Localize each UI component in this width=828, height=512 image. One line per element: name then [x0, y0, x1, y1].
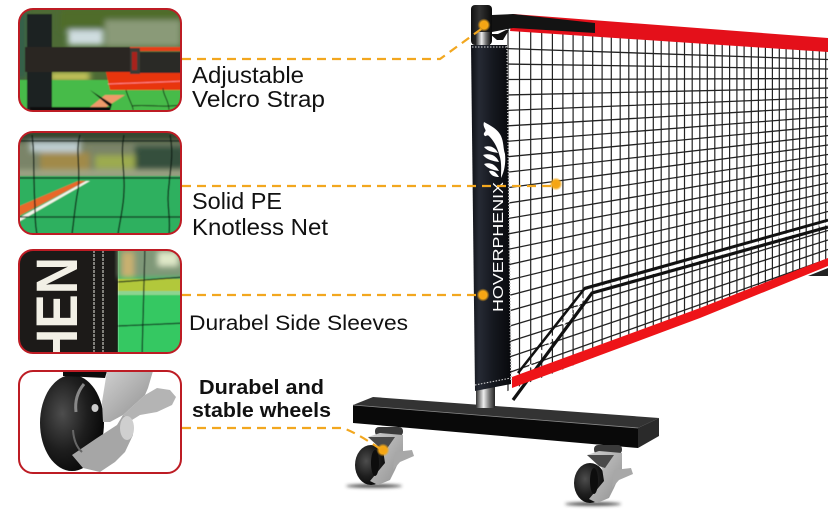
headband cable and support	[513, 220, 828, 400]
brand logo: phoenix	[483, 122, 505, 178]
photo: side sleeve	[18, 249, 182, 354]
label: durabel and stable wheels	[192, 377, 331, 422]
label: adjustable velcro strap: Adjustable	[192, 62, 304, 88]
photo: caster wheel	[19, 371, 181, 473]
label: durabel and stable wheels: Durabel and	[199, 377, 324, 399]
photo: knotless net	[15, 128, 185, 238]
label: durabel side sleeves: Durabel Side Sleeves	[189, 312, 408, 335]
net bottom red band	[512, 258, 828, 388]
label: adjustable velcro strap: Velcro Strap	[192, 86, 325, 112]
label: solid PE knotless net	[192, 188, 329, 240]
base bar	[353, 397, 659, 448]
net mesh	[500, 0, 828, 512]
photo: side sleeve: HEN	[25, 257, 90, 366]
label: solid PE knotless net: Solid PE	[192, 188, 282, 214]
photo: velcro strap	[15, 5, 185, 115]
label: adjustable velcro strap	[192, 62, 325, 112]
pole and sleeve	[471, 5, 595, 408]
net top red band	[510, 14, 828, 52]
label: solid PE knotless net: Knotless Net	[192, 214, 329, 240]
right caster wheel	[565, 445, 633, 506]
brand name: HOVERPHENIX	[490, 182, 507, 312]
left caster wheel	[346, 427, 414, 488]
floor foot at right edge	[808, 268, 828, 276]
leader line: velcro strap	[182, 18, 490, 59]
label: durabel and stable wheels: stable wheels	[192, 400, 331, 422]
leader line: knotless net	[182, 178, 562, 190]
leader line: wheels	[182, 428, 390, 456]
leader line: side sleeves	[182, 288, 490, 302]
